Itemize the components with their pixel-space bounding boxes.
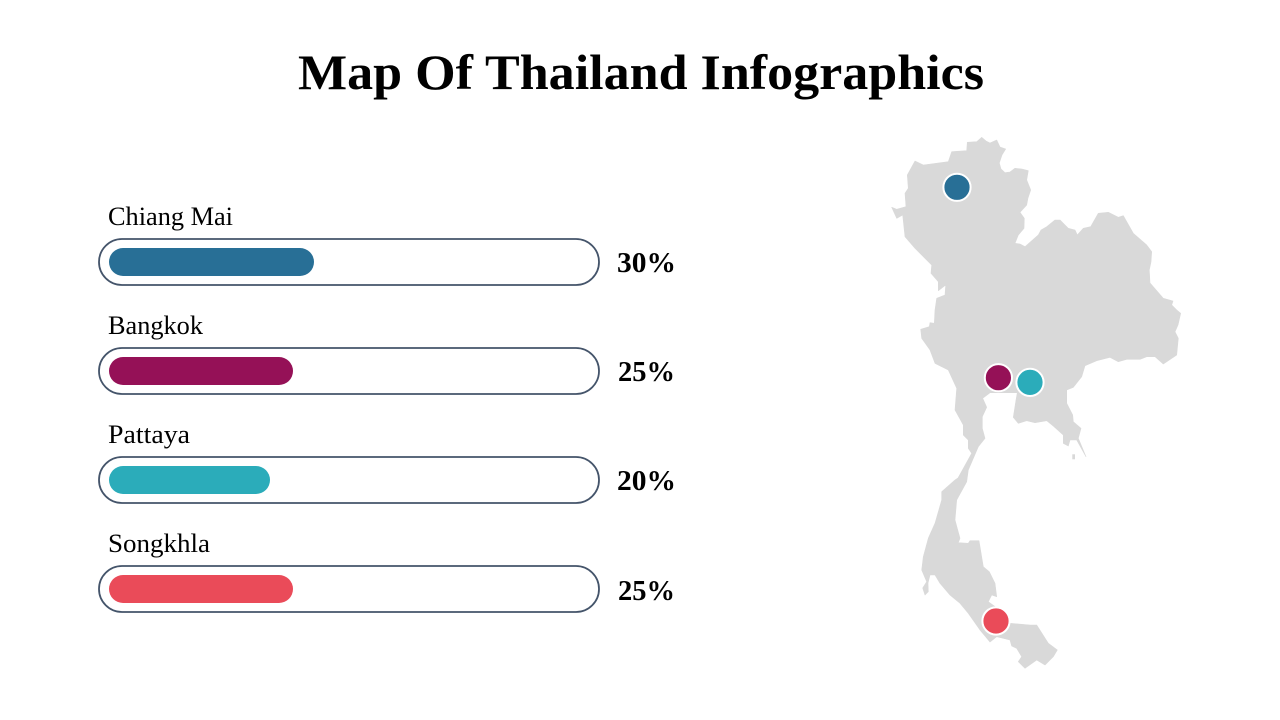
bar fill: Chiang Mai: [109, 248, 314, 276]
value: 20%: 20%: [617, 466, 676, 497]
panel: progress bars: [99, 202, 676, 612]
bar track: Songkhla: [99, 566, 599, 612]
map shape: [892, 137, 1181, 668]
marker: Songkhla: [982, 607, 1010, 635]
row: Pattaya: [99, 420, 676, 503]
marker: Bangkok: [985, 364, 1012, 391]
label: Chiang Mai: Chiang Mai: [108, 202, 233, 231]
marker: Chiang Mai: [943, 174, 971, 201]
value: 25%: 25%: [618, 357, 675, 388]
label: Pattaya: Pattaya: [108, 420, 190, 449]
bar fill: Songkhla: [109, 575, 293, 603]
row: Chiang Mai: [99, 202, 676, 285]
title: Map Of Thailand Infographics: [298, 44, 984, 100]
bar track: Chiang Mai: [99, 239, 599, 285]
bar fill: Bangkok: [109, 357, 293, 385]
row: Bangkok: [99, 311, 675, 394]
bar fill: Pattaya: [109, 466, 270, 494]
island: [1072, 454, 1075, 459]
marker: Pattaya: [1016, 369, 1044, 396]
bar track: Bangkok: [99, 348, 599, 394]
value: 25%: 25%: [618, 576, 675, 607]
bar track: Pattaya: [99, 457, 599, 503]
label: Bangkok: Bangkok: [108, 311, 203, 340]
row: Songkhla: [99, 529, 675, 612]
value: 30%: 30%: [617, 248, 676, 279]
map of Thailand: [892, 137, 1181, 668]
label: Songkhla: Songkhla: [108, 529, 210, 558]
